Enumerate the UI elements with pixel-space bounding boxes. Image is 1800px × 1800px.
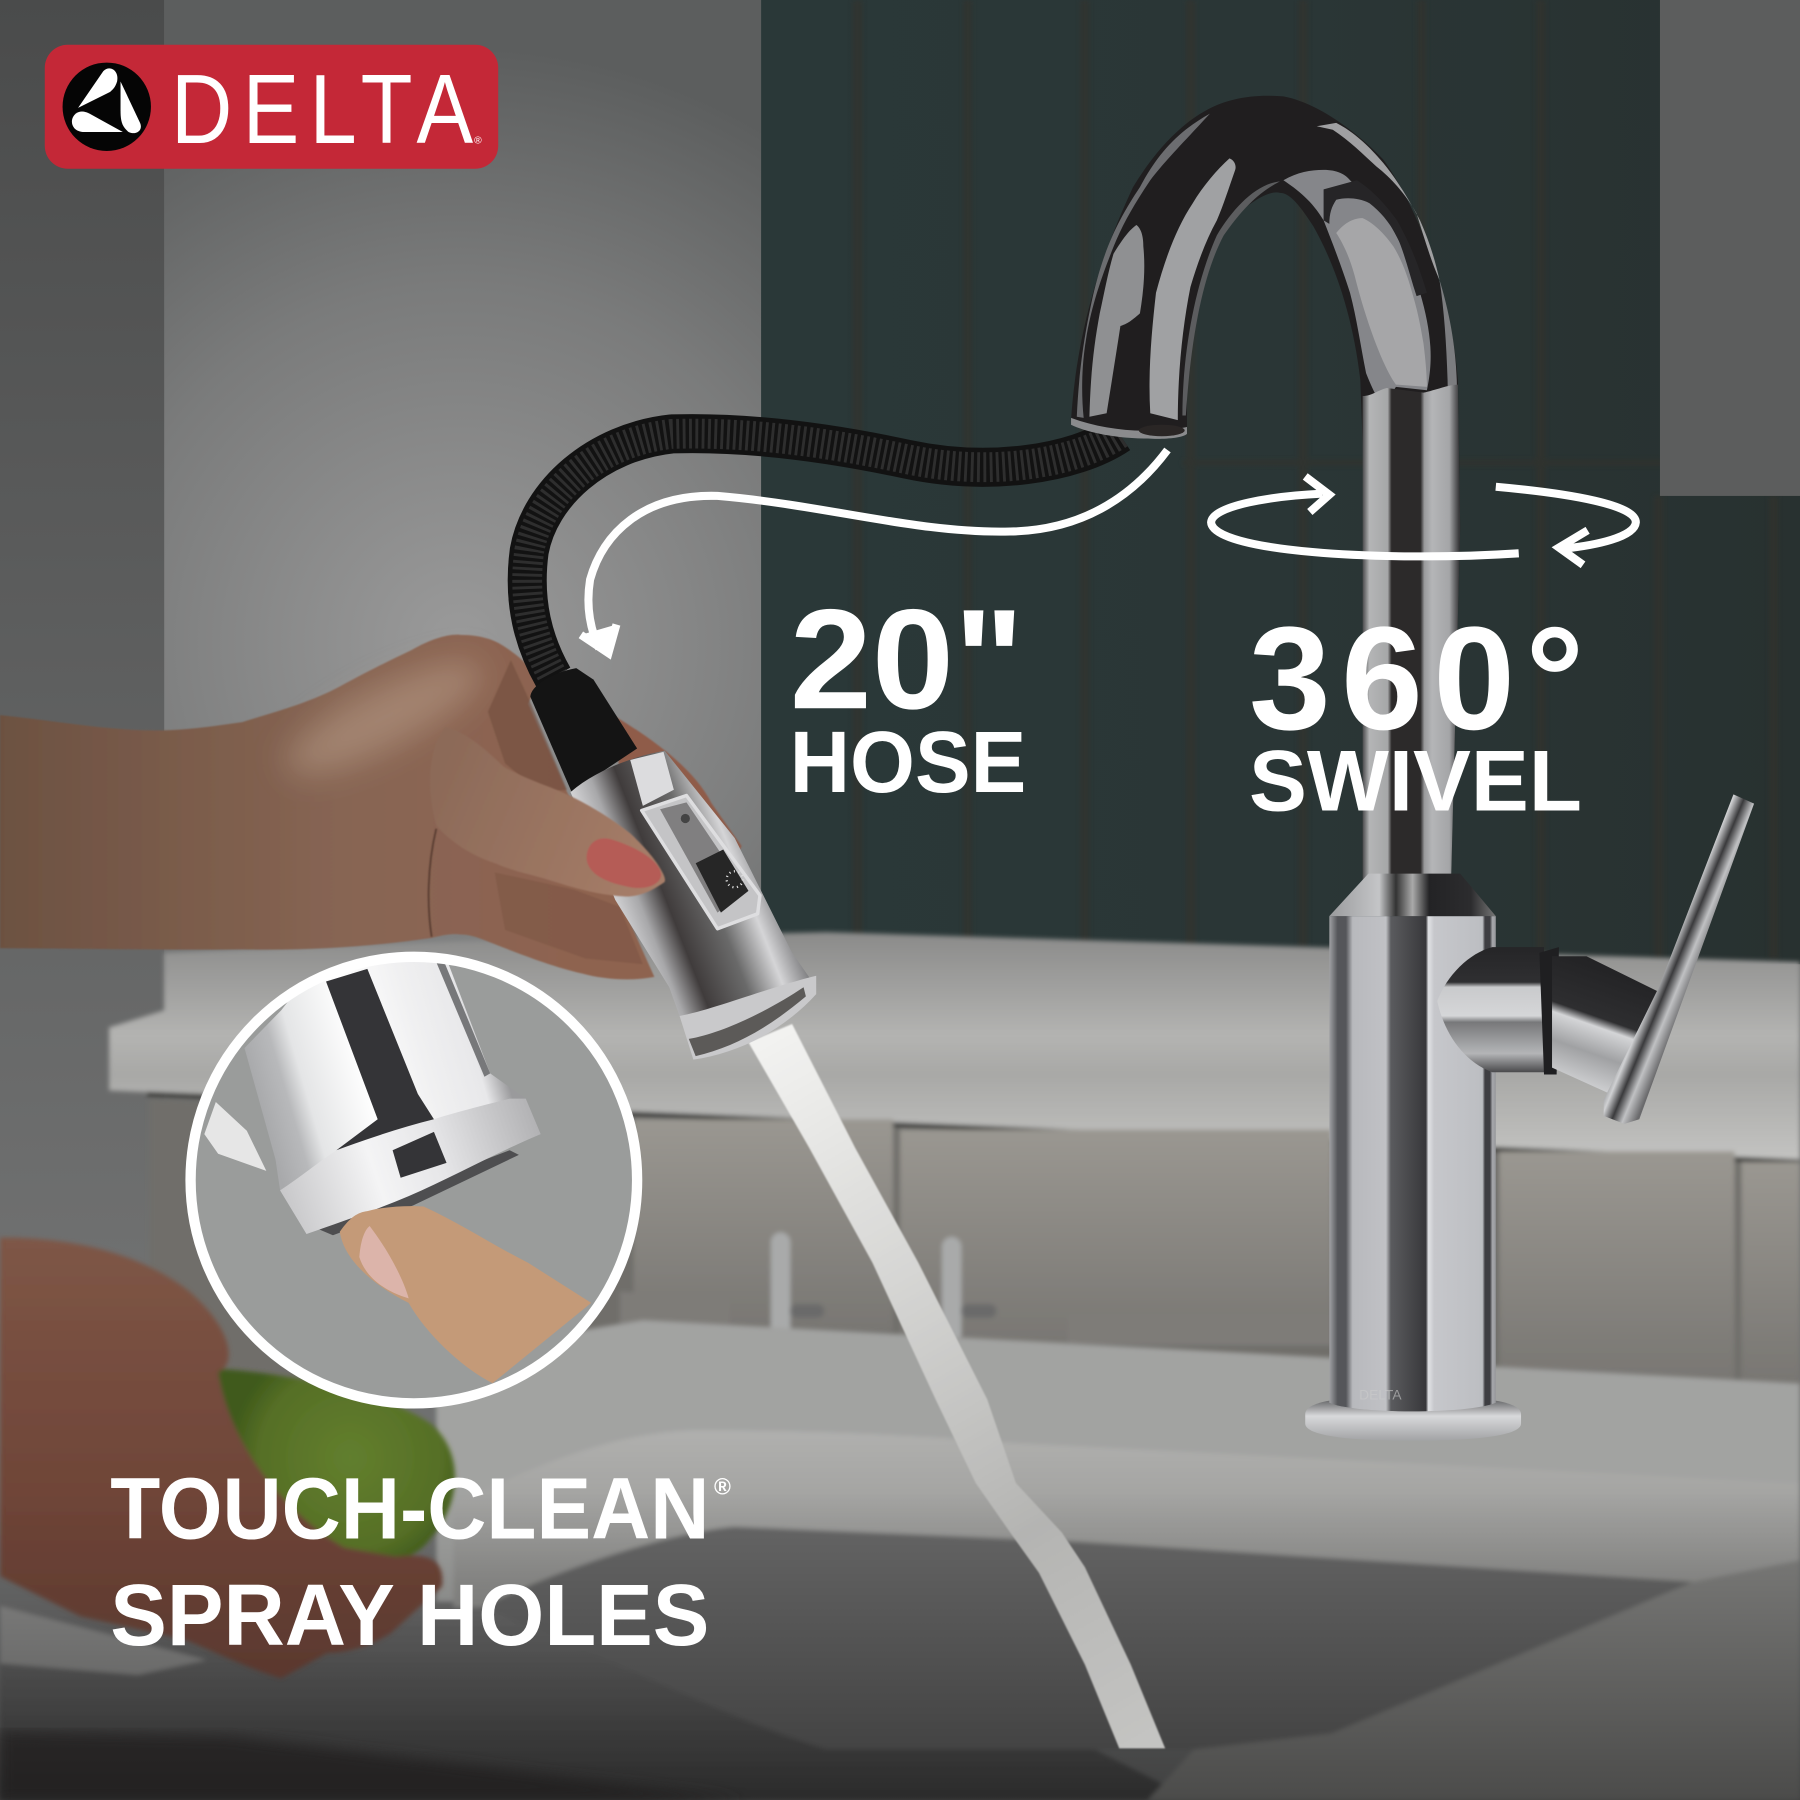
- valve arm: [1437, 947, 1544, 1072]
- callout: 20 inch hose: HOSE: [790, 714, 1026, 811]
- fingers behind spray head: [615, 716, 742, 907]
- inner band highlight: [1150, 158, 1236, 420]
- top-right rim light: [1317, 123, 1440, 280]
- rim light left: [1077, 114, 1210, 418]
- thumb over spray head: [429, 727, 665, 937]
- palm crease: [429, 829, 436, 937]
- gooseneck spout: [1071, 96, 1460, 884]
- fingertip: [340, 1206, 591, 1383]
- callout: touch-clean spray holes: SPRAY HOLES: [110, 1567, 709, 1664]
- rubber collar: [530, 668, 637, 792]
- spray button: [642, 796, 760, 929]
- hose: [527, 434, 1119, 677]
- logo: Delta: DELTA: [171, 54, 474, 164]
- back-of-hand highlight: [274, 641, 495, 794]
- spray head close-up: [204, 953, 541, 1235]
- logo: Delta: ®: [474, 135, 482, 146]
- cylinder body: [1329, 916, 1496, 1411]
- lens reflection: [1336, 218, 1427, 387]
- upper hand: [0, 635, 742, 979]
- callout: touch-clean spray holes: ®: [714, 1474, 731, 1500]
- lever: [1604, 794, 1754, 1124]
- knob: [1552, 956, 1661, 1095]
- callout: touch-clean spray holes: TOUCH-CLEAN: [110, 1460, 709, 1557]
- countertop and sink: [0, 1320, 1800, 1800]
- callout: 360 swivel: SWIVEL: [1249, 733, 1582, 829]
- inset circle: touch-clean spray holes: [191, 953, 637, 1403]
- callout: 360 swivel: 360°: [1249, 597, 1584, 761]
- stem chrome: [1363, 385, 1460, 884]
- water stream: [748, 1024, 1165, 1748]
- dark reflection: [1324, 180, 1427, 296]
- callout: touch-clean spray holes: [110, 1460, 731, 1664]
- shelf and cabinets: [109, 932, 1800, 1395]
- faucet body and handle: [1305, 794, 1754, 1441]
- arrow: hose length: [581, 450, 1167, 653]
- left lens highlight: [1089, 225, 1144, 417]
- callout: 20 inch hose: [790, 580, 1026, 811]
- engraved delta mark: DELTA: [1359, 1387, 1402, 1402]
- nail: [587, 838, 661, 888]
- right inner broad reflection: [1283, 170, 1431, 406]
- arrow: 360 swivel: [1211, 476, 1636, 565]
- base flange: [1305, 1396, 1521, 1441]
- spout mouth: [1071, 418, 1187, 439]
- logo: Delta: [45, 45, 498, 169]
- callout: 20 inch hose: 20": [790, 580, 1024, 739]
- bottom vignette: [0, 1492, 1800, 1800]
- spray head: [530, 668, 816, 1060]
- valve ring: [1539, 947, 1559, 1074]
- lower hand holding lime: [0, 1238, 455, 1678]
- chrome body: [571, 751, 816, 1058]
- hand: [0, 1238, 442, 1678]
- shoulder cone: [1329, 874, 1496, 916]
- inner palm shadow: [488, 660, 567, 792]
- lime: [212, 1368, 455, 1560]
